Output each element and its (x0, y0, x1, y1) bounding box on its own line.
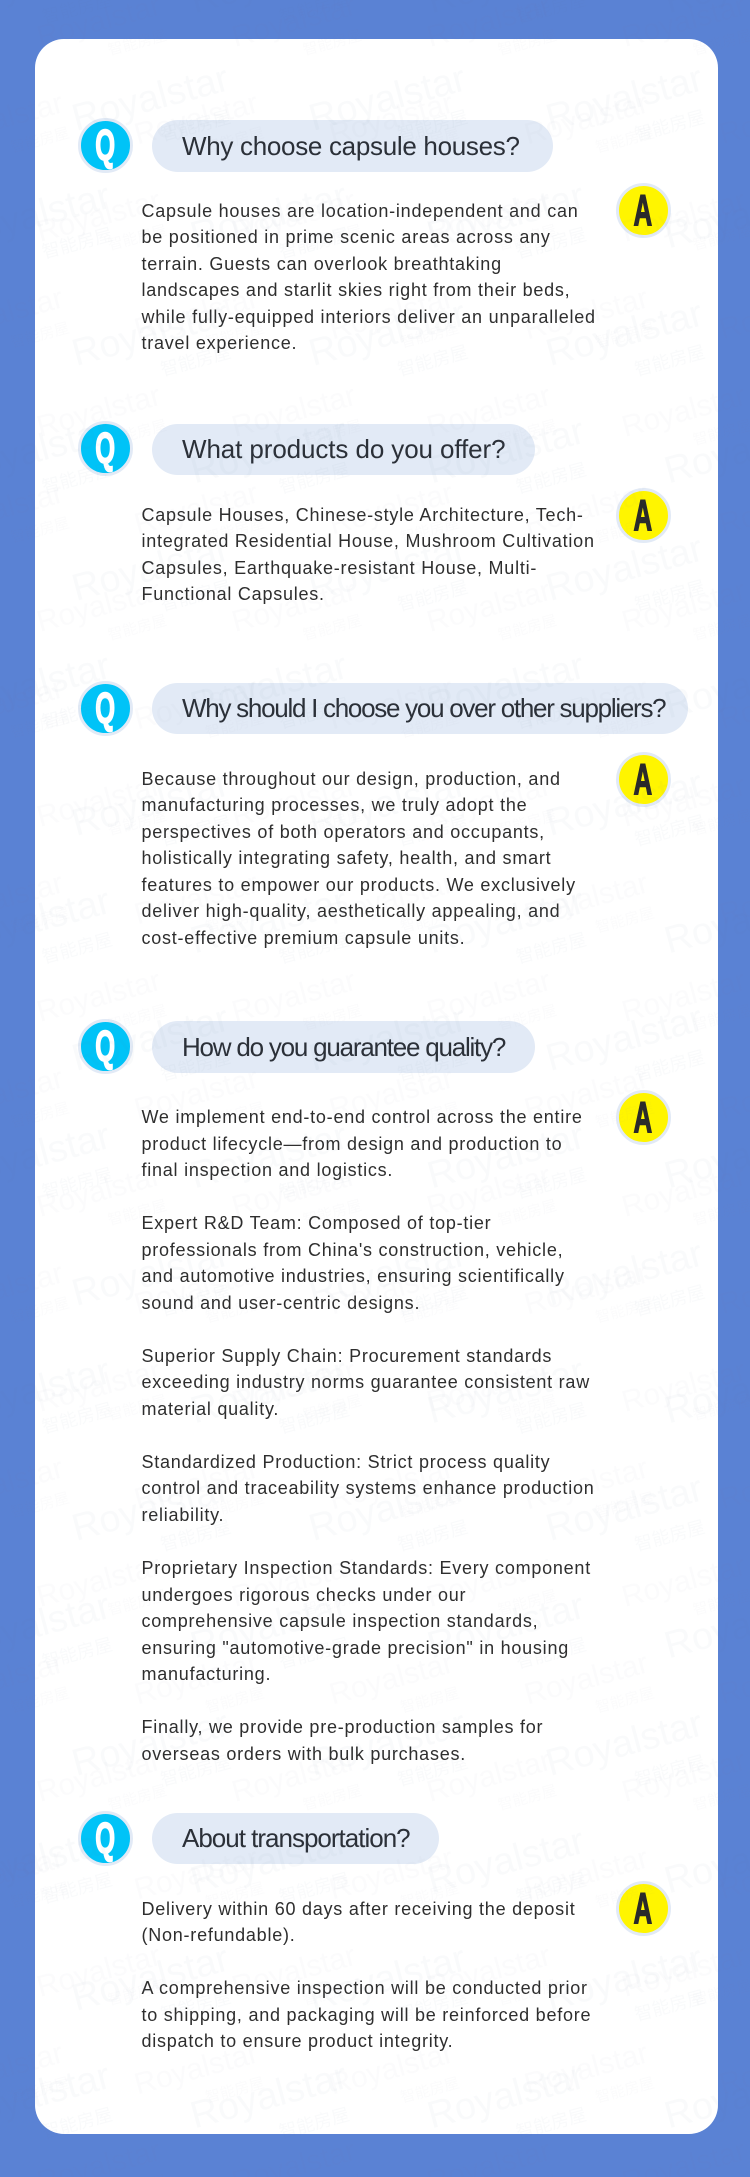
answer text: We implement end-to-end control across the entire (142, 1107, 583, 1127)
icon: Q badge (78, 1019, 133, 1074)
question heading pill (152, 120, 553, 172)
answer text (142, 769, 576, 948)
icon: Q badge: Q (95, 1022, 115, 1071)
answer text: Proprietary Inspection Standards: Every component (142, 1558, 591, 1578)
answer text: and automotive industries, ensuring scientifically (142, 1266, 565, 1286)
answer text: professionals from China's construction, vehicle, (142, 1240, 563, 1260)
answer text: cost-effective premium capsule units. (142, 928, 465, 948)
answer text: Expert R&D Team: Composed of top-tier (142, 1213, 491, 1233)
answer text (142, 1899, 591, 2051)
icon: A badge: A (634, 1884, 652, 1933)
icon: Q badge: Q (95, 121, 115, 170)
icon: A badge (616, 488, 670, 543)
question heading pill: Why choose capsule houses? (182, 131, 520, 161)
question heading pill (152, 683, 688, 734)
answer text: travel experience. (142, 333, 297, 353)
icon: Q badge: Q (95, 424, 115, 473)
answer text: Capsules, Earthquake-resistant House, Multi- (142, 558, 537, 578)
answer text: manufacturing processes, we truly adopt the (142, 795, 527, 815)
icon: Q badge (78, 118, 133, 173)
icon: A badge: A (634, 186, 652, 235)
answer text: A comprehensive inspection will be conducted prior (142, 1978, 588, 1998)
answer text (142, 1107, 594, 1764)
icon: Q badge (78, 421, 133, 476)
answer text: (Non-refundable). (142, 1925, 296, 1945)
answer text: final inspection and logistics. (142, 1160, 393, 1180)
answer text: undergoes rigorous checks under our (142, 1585, 466, 1605)
answer text: overseas orders with bulk purchases. (142, 1744, 466, 1764)
answer text: holistically integrating safety, health, and smart (142, 848, 551, 868)
panel: why choose capsule houses (78, 118, 671, 353)
answer text: dispatch to ensure product integrity. (142, 2031, 453, 2051)
answer text: sound and user-centric designs. (142, 1293, 420, 1313)
answer text: landscapes and starlit skies right from their beds, (142, 280, 570, 300)
icon: A badge: A (634, 755, 652, 804)
answer text: ensuring "automotive-grade precision" in housing (142, 1638, 569, 1658)
question heading pill: How do you guarantee quality? (182, 1032, 505, 1062)
icon: A badge (616, 183, 670, 238)
answer text: integrated Residential House, Mushroom Cultivation (142, 531, 595, 551)
answer text: to shipping, and packaging will be reinforced before (142, 2005, 591, 2025)
answer text: Delivery within 60 days after receiving the deposit (142, 1899, 575, 1919)
icon: A badge: A (634, 1093, 652, 1142)
question heading pill: About transportation? (182, 1823, 410, 1853)
icon: A badge (616, 1090, 670, 1145)
question heading pill: Why should I choose you over other suppliers? (182, 693, 665, 723)
answer text: control and traceability systems enhance production (142, 1478, 594, 1498)
answer text: while fully-equipped interiors deliver an unparalleled (142, 307, 596, 327)
icon: Q badge (78, 1811, 133, 1866)
answer text: terrain. Guests can overlook breathtaking (142, 254, 502, 274)
answer text: Capsule Houses, Chinese-style Architecture, Tech- (142, 505, 584, 525)
panel: what products do you offer (78, 421, 671, 604)
panel: about transportation (78, 1811, 671, 2051)
answer text: features to empower our products. We exclusively (142, 875, 576, 895)
answer text: reliability. (142, 1505, 224, 1525)
question heading pill (152, 1813, 439, 1864)
icon: A badge (616, 1881, 670, 1936)
icon: A badge (616, 752, 670, 807)
answer text (142, 505, 595, 604)
answer text: Capsule houses are location-independent and can (142, 201, 579, 221)
answer text: Superior Supply Chain: Procurement standards (142, 1346, 552, 1366)
icon: A badge: A (634, 491, 652, 540)
icon: Q badge: Q (95, 1814, 115, 1863)
answer text: be positioned in prime scenic areas across any (142, 227, 551, 247)
panel: how do you guarantee quality (78, 1019, 671, 1764)
answer text: Standardized Production: Strict process quality (142, 1452, 550, 1472)
answer text: deliver high-quality, aesthetically appealing, and (142, 901, 560, 921)
answer text: exceeding industry norms guarantee consistent raw (142, 1372, 590, 1392)
question heading pill (152, 424, 535, 475)
answer text: product lifecycle—from design and production to (142, 1134, 562, 1154)
icon: Q badge (78, 681, 133, 736)
answer text: Finally, we provide pre-production samples for (142, 1717, 543, 1737)
answer text: Because throughout our design, production, and (142, 769, 561, 789)
answer text (142, 201, 596, 353)
icon: Q badge: Q (95, 684, 115, 733)
panel: why choose you over other suppliers (78, 681, 688, 948)
question heading pill (152, 1021, 535, 1073)
answer text: perspectives of both operators and occupants, (142, 822, 545, 842)
answer text: manufacturing. (142, 1664, 271, 1684)
answer text: material quality. (142, 1399, 279, 1419)
answer text: comprehensive capsule inspection standards, (142, 1611, 538, 1631)
question heading pill: What products do you offer? (182, 434, 505, 464)
answer text: Functional Capsules. (142, 584, 325, 604)
